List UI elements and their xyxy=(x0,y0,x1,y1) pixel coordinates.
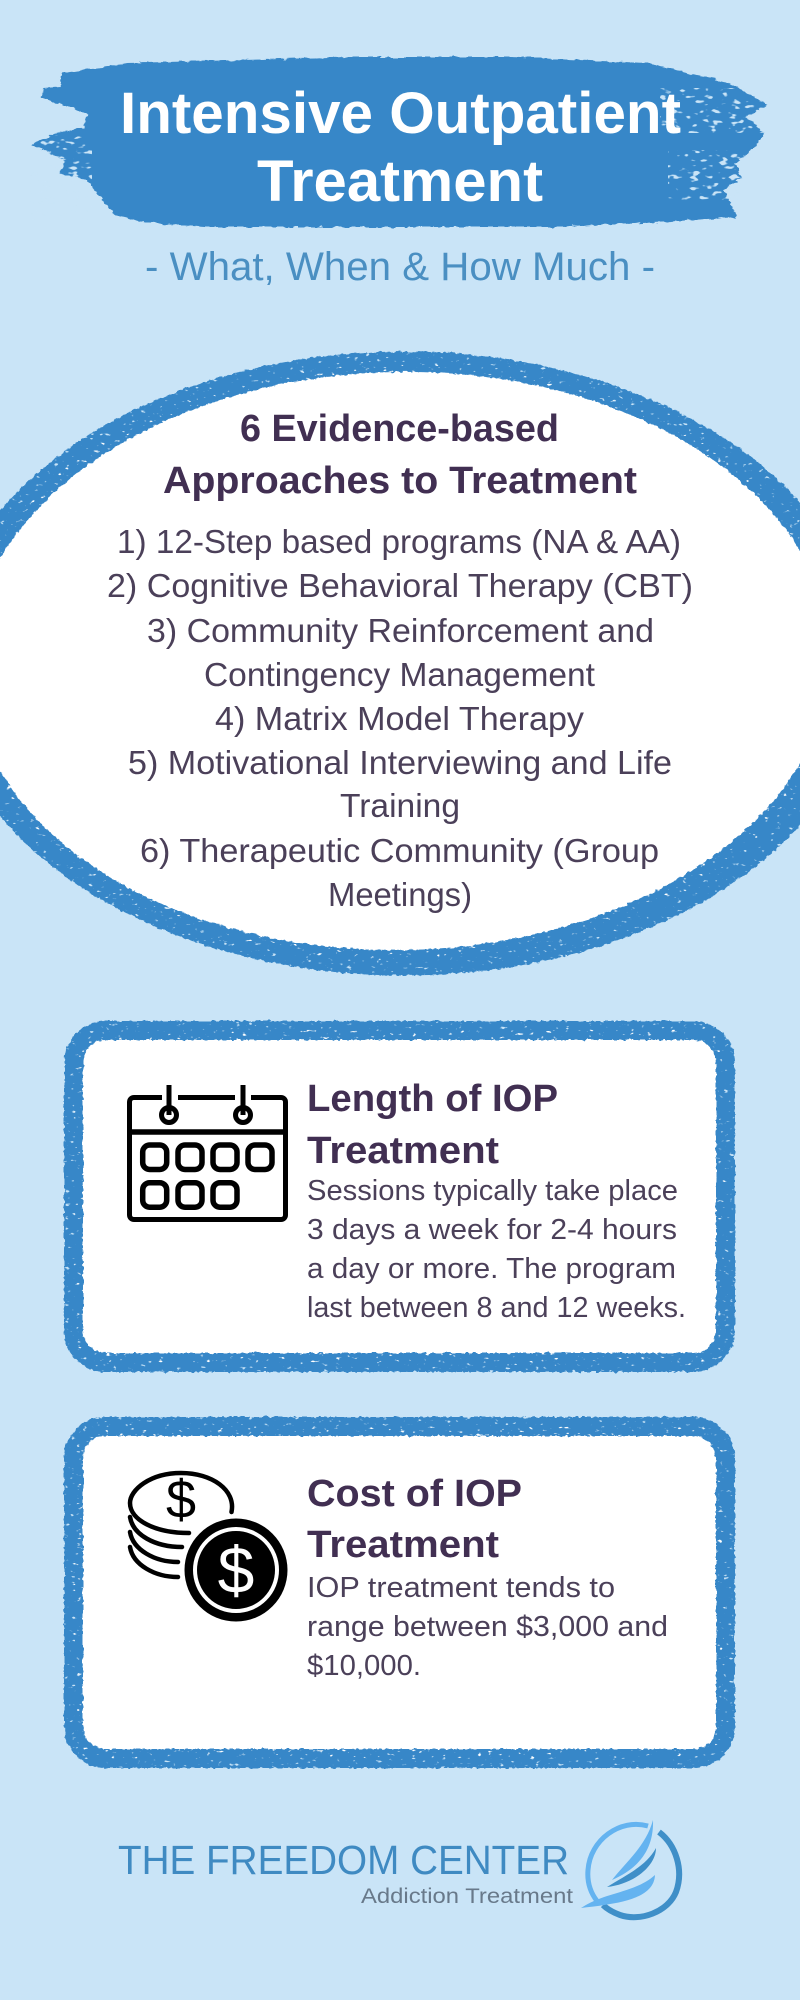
card heading: Treatment xyxy=(307,1524,499,1566)
logo: The Freedom Center xyxy=(118,1820,679,1917)
card body text: $10,000. xyxy=(307,1650,421,1682)
panel heading xyxy=(163,408,637,502)
icon: coins xyxy=(130,1470,288,1622)
card frame xyxy=(74,1030,726,1362)
card heading: Treatment xyxy=(307,1130,499,1172)
list of approaches: Training xyxy=(340,787,460,824)
logo wordmark: THE FREEDOM CENTER xyxy=(118,1837,569,1883)
white ellipse with brushed ring xyxy=(0,352,800,976)
card body text: IOP treatment tends to xyxy=(307,1572,615,1604)
logo tagline: Addiction Treatment xyxy=(361,1885,573,1908)
card body text: range between $3,000 and xyxy=(307,1611,668,1643)
list of approaches xyxy=(107,523,693,913)
panel heading: 6 Evidence-based xyxy=(240,408,559,450)
card heading: Length of IOP xyxy=(307,1078,558,1120)
icon: calendar xyxy=(130,1085,286,1220)
title text: Treatment xyxy=(257,149,543,214)
card heading: Cost of IOP xyxy=(307,1473,522,1515)
icon: circle and feather xyxy=(581,1820,679,1917)
subtitle: - What, When & How Much - xyxy=(145,245,655,289)
list of approaches: Contingency Management xyxy=(204,656,595,693)
card body text: last between 8 and 12 weeks. xyxy=(307,1292,686,1324)
card heading xyxy=(307,1078,558,1172)
list of approaches: 2) Cognitive Behavioral Therapy (CBT) xyxy=(107,567,693,604)
card body text xyxy=(307,1572,668,1682)
card body text: a day or more. The program xyxy=(307,1253,676,1285)
icon: coins: $ xyxy=(166,1470,196,1530)
list of approaches: 4) Matrix Model Therapy xyxy=(215,700,585,737)
list of approaches: 3) Community Reinforcement and xyxy=(147,612,654,649)
list of approaches: Meetings) xyxy=(328,876,472,913)
brush stroke background xyxy=(30,57,770,227)
list of approaches: 6) Therapeutic Community (Group xyxy=(140,832,659,869)
title text: Intensive Outpatient xyxy=(120,81,681,146)
list of approaches: 5) Motivational Interviewing and Life xyxy=(128,744,672,781)
card frame xyxy=(74,1426,726,1758)
list of approaches: 1) 12-Step based programs (NA & AA) xyxy=(117,523,681,560)
card body text: 3 days a week for 2-4 hours xyxy=(307,1214,677,1246)
panel: evidence-based approaches xyxy=(0,352,800,976)
panel: cost of IOP treatment xyxy=(74,1426,726,1758)
title banner xyxy=(30,57,770,227)
panel heading: Approaches to Treatment xyxy=(163,460,637,502)
title text xyxy=(120,81,681,214)
icon: coins: $ xyxy=(218,1533,254,1607)
panel: length of IOP treatment xyxy=(74,1030,726,1362)
card body text xyxy=(307,1175,686,1324)
card heading xyxy=(307,1473,522,1566)
card body text: Sessions typically take place xyxy=(307,1175,678,1207)
